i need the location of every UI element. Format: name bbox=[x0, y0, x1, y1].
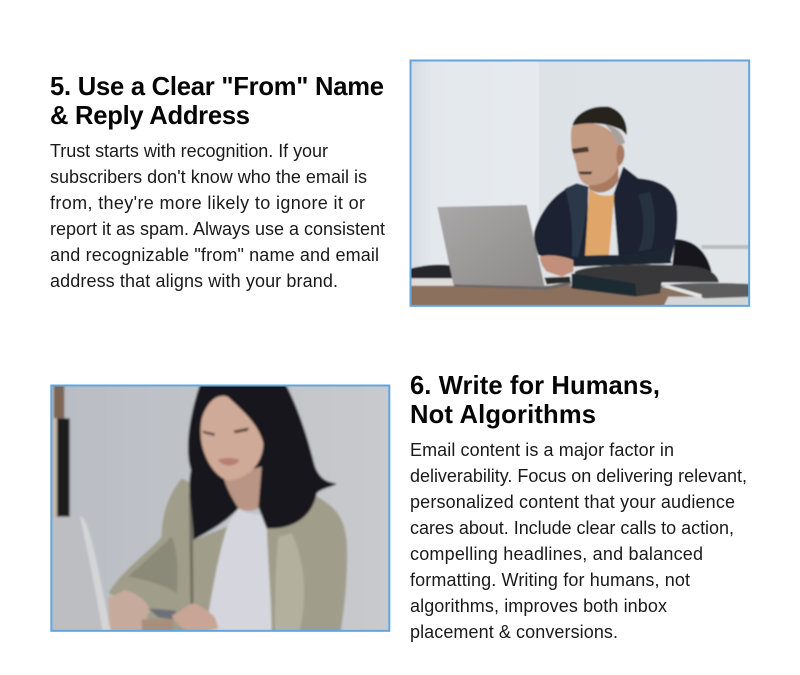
text block: section 5 body: subscribers don't know who the email is bbox=[50, 167, 367, 187]
text block: section 6 body: formatting. Writing for humans, not bbox=[410, 570, 690, 590]
text block: section 6 body: deliverability. Focus on delivering relevant, bbox=[410, 466, 747, 486]
text block: section 6 body: algorithms, improves both inbox bbox=[410, 596, 667, 616]
photo: woman with a payment card at a laptop bbox=[50, 384, 390, 632]
neck and face bbox=[588, 162, 618, 192]
hand bbox=[540, 255, 573, 277]
text block: section 6 body: cares about. Include clear calls to action, bbox=[410, 518, 734, 538]
laptop bbox=[437, 205, 545, 288]
heading: section 5: 5. Use a Clear "From" Name bbox=[50, 73, 384, 101]
tee bbox=[205, 508, 272, 635]
notebook left bbox=[405, 265, 452, 279]
photo: man working on a laptop bbox=[410, 60, 750, 307]
tablet on table bbox=[662, 283, 755, 298]
text block: section 6 body: personalized content that your audience bbox=[410, 492, 735, 512]
text block: section 5 body: and recognizable "from" name and email bbox=[50, 245, 379, 265]
heading: section 5: & Reply Address bbox=[50, 102, 250, 130]
text block: section 6 body: compelling headlines, and balanced bbox=[410, 544, 703, 564]
table item bbox=[141, 618, 173, 630]
heading: section 5 bbox=[50, 73, 384, 130]
jacket bbox=[534, 167, 677, 267]
hand bbox=[172, 603, 218, 635]
face bbox=[201, 396, 263, 481]
hair back mass bbox=[188, 380, 337, 540]
shirt bbox=[585, 188, 614, 256]
panel: section 5 text bbox=[50, 73, 385, 291]
text block: section 5 body: address that aligns with your brand. bbox=[50, 271, 338, 291]
hair bbox=[572, 106, 627, 135]
laptop bbox=[45, 516, 112, 635]
chair bbox=[672, 239, 712, 272]
table bbox=[412, 284, 696, 305]
shirt jacket bbox=[108, 478, 347, 635]
arm bbox=[108, 590, 150, 635]
panel: section 6 text bbox=[410, 372, 747, 642]
text block: section 6 body: Email content is a major factor in bbox=[410, 440, 674, 460]
text block: section 6 body bbox=[410, 440, 747, 642]
folio bbox=[572, 265, 719, 297]
text block: section 5 body: Trust starts with recognition. If your bbox=[50, 141, 328, 161]
heading: section 6: 6. Write for Humans, bbox=[410, 372, 660, 400]
text block: section 5 body bbox=[50, 141, 385, 291]
heading: section 6 bbox=[410, 372, 660, 429]
heading: section 6: Not Algorithms bbox=[410, 401, 596, 429]
text block: section 5 body: from, they're more likely to ignore it or bbox=[50, 193, 365, 213]
text block: section 6 body: placement & conversions. bbox=[410, 622, 618, 642]
door edge bbox=[54, 380, 64, 418]
text block: section 5 body: report it as spam. Always use a consistent bbox=[50, 219, 385, 239]
card bbox=[148, 608, 177, 619]
neck bbox=[223, 467, 262, 511]
